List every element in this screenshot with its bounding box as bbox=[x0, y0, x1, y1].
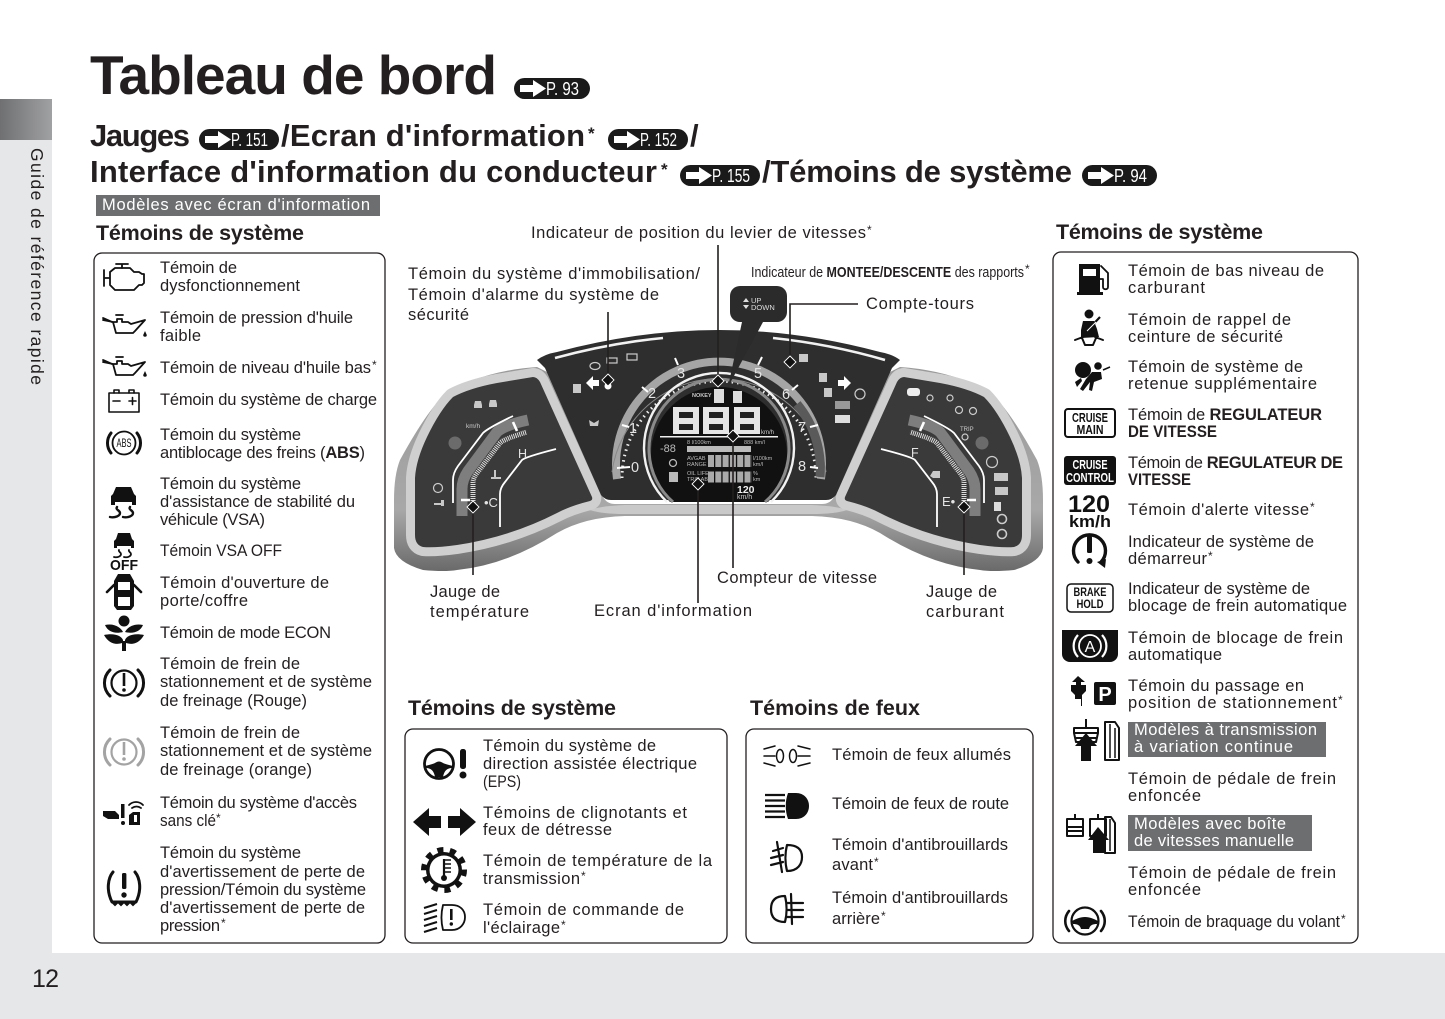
icon: brake hold: BRAKE bbox=[1074, 587, 1107, 599]
panel: central system indicators: Témoins de clignotants et bbox=[483, 804, 687, 822]
panel: left system indicators: antiblocage des freins (ABS) bbox=[160, 444, 365, 462]
icon: ABS bbox=[107, 432, 141, 454]
icon: cruise control: CONTROL bbox=[1066, 471, 1114, 485]
icon: cruise control: CRUISE bbox=[1072, 458, 1108, 472]
icon: orange brake bbox=[104, 739, 144, 765]
panel: left system indicators bbox=[94, 253, 385, 943]
label: tachometer: Compte-tours bbox=[866, 295, 974, 313]
panel: left system indicators: Témoin de niveau d'huile bas bbox=[160, 359, 371, 377]
icon: cruise main bbox=[1065, 409, 1115, 437]
label: shift position indicator: * bbox=[867, 223, 872, 237]
panel: light indicators: arrière bbox=[832, 910, 880, 928]
panel: left system indicators: d'assistance de stabilité du bbox=[160, 493, 355, 511]
tag: CVT: à variation continue bbox=[1134, 738, 1293, 756]
panel: central system indicators: Témoin du système de bbox=[483, 737, 656, 755]
panel: central system indicators bbox=[405, 729, 727, 943]
model tag: Modèles avec écran d'information bbox=[102, 196, 370, 214]
display readouts bbox=[660, 389, 778, 501]
panel: right system indicators: blocage de frein automatique bbox=[1128, 597, 1347, 615]
icon: VSA bbox=[110, 487, 136, 517]
panel: right system indicators: * bbox=[1338, 693, 1343, 707]
pod labels and tell-tales: F bbox=[911, 446, 919, 460]
display readouts: 888 km/l bbox=[744, 440, 765, 446]
icon: headlights on bbox=[764, 746, 810, 766]
heading: right system indicators: Témoins de système bbox=[1056, 220, 1263, 244]
icon: cruise main: CRUISE bbox=[1072, 411, 1108, 425]
subtitle heading: /Ecran d'information bbox=[281, 118, 585, 153]
panel: left system indicators: * bbox=[372, 358, 377, 372]
icon: fuel bbox=[1077, 264, 1108, 295]
label: speedometer: Compteur de vitesse bbox=[717, 569, 877, 587]
panel: left system indicators: porte/coffre bbox=[160, 592, 248, 610]
icon: oil level bbox=[103, 357, 147, 377]
display readouts: AVGAB bbox=[687, 456, 706, 462]
icon: speed alert: km/h bbox=[1069, 512, 1111, 531]
display readouts: -88 bbox=[660, 443, 676, 455]
panel: right system indicators: retenue supplémentaire bbox=[1128, 375, 1317, 393]
panel: right system indicators: enfoncée bbox=[1128, 881, 1201, 899]
icon: turn signals bbox=[413, 808, 476, 836]
pod labels and tell-tales: TRIP bbox=[960, 427, 974, 433]
subtitle heading: P. 94 bbox=[1114, 165, 1147, 186]
subtitle heading bbox=[90, 118, 1157, 189]
panel: right system indicators: VITESSE bbox=[1128, 471, 1191, 489]
panel: right system indicators: ceinture de sécurité bbox=[1128, 328, 1283, 346]
tachometer bbox=[612, 357, 826, 479]
tachometer: 6 bbox=[782, 387, 790, 403]
icon: door bbox=[107, 574, 141, 610]
label: information display: Ecran d'information bbox=[594, 602, 752, 620]
panel: right system indicators: * bbox=[1208, 549, 1213, 563]
subtitle heading: Interface d'information du conducteur bbox=[90, 154, 657, 189]
left pod gauges bbox=[448, 416, 556, 527]
sidebar label: Guide de référence rapide bbox=[27, 148, 47, 385]
panel: light indicators: Témoin d'antibrouillards bbox=[832, 889, 1008, 907]
display readouts: OIL LIFE bbox=[687, 471, 709, 477]
panel: left system indicators: d'avertissement de perte de bbox=[160, 863, 365, 881]
panel: left system indicators: Témoin de frein de bbox=[160, 655, 300, 673]
panel: central system indicators: l'éclairage bbox=[483, 919, 560, 937]
icon: shift to park bbox=[1071, 676, 1116, 707]
panel: right system indicators: automatique bbox=[1128, 646, 1222, 664]
subtitle heading: P. 152 bbox=[640, 129, 677, 150]
display readouts: 120 bbox=[737, 484, 755, 496]
panel: light indicators: Témoin de feux allumés bbox=[832, 746, 1011, 764]
tag: manual: Modèles avec boîte bbox=[1134, 815, 1286, 833]
icon: cruise control bbox=[1064, 456, 1116, 485]
panel: light indicators: Témoin de feux de route bbox=[832, 795, 1009, 813]
display readouts: km bbox=[753, 477, 761, 483]
display readouts: NOKEY bbox=[692, 393, 712, 399]
panel: right system indicators: Témoin de pédale de frein bbox=[1128, 770, 1336, 788]
leader lines and diamonds bbox=[467, 245, 970, 603]
icon: seat belt bbox=[1075, 310, 1103, 345]
panel: left system indicators: dysfonctionnement bbox=[160, 277, 300, 295]
shift-up callout: UP bbox=[751, 296, 761, 305]
icon: ABS: ABS bbox=[116, 438, 132, 450]
display readouts: km/h bbox=[761, 430, 774, 436]
icon: ECON bbox=[104, 616, 144, 651]
display readouts: 8 l/100km bbox=[687, 440, 711, 446]
panel: left system indicators: Témoin d'ouverture de bbox=[160, 574, 329, 592]
panel: left system indicators: pression bbox=[160, 917, 220, 935]
page reference pill P.93 bbox=[514, 78, 590, 99]
label: temperature gauge: température bbox=[430, 603, 529, 621]
icon: shift to park: P bbox=[1098, 684, 1112, 706]
subtitle heading: * bbox=[588, 124, 595, 143]
heading: light indicators: Témoins de feux bbox=[750, 696, 920, 720]
icon: red brake bbox=[104, 670, 144, 696]
label: temperature gauge bbox=[430, 583, 529, 621]
icon: keyless bbox=[103, 802, 143, 825]
panel: right system indicators: Témoin de REGULATEUR bbox=[1128, 406, 1322, 424]
panel: left system indicators: stationnement et de système bbox=[160, 742, 372, 760]
icon: VSA OFF bbox=[110, 533, 138, 574]
panel: light indicators: avant bbox=[832, 856, 873, 874]
label: fuel gauge: Jauge de bbox=[926, 583, 997, 601]
center lower silver band bbox=[590, 505, 847, 514]
display readouts: % bbox=[753, 471, 758, 477]
panel: central system indicators: Témoin de commande de bbox=[483, 901, 684, 919]
panel: left system indicators: Témoin de mode ECON bbox=[160, 624, 331, 642]
panel: left system indicators: Témoin du système de charge bbox=[160, 391, 377, 409]
icon: oil pressure bbox=[103, 315, 147, 337]
pod labels and tell-tales: km/h bbox=[466, 423, 480, 430]
tachometer: 7 bbox=[798, 420, 806, 436]
icon: speed alert bbox=[1068, 491, 1111, 531]
tag: manual bbox=[1128, 815, 1312, 851]
label: shift position indicator: Indicateur de position du levier de vitesses bbox=[531, 224, 866, 242]
label: fuel gauge: carburant bbox=[926, 603, 1004, 621]
pod labels and tell-tales: E• bbox=[942, 494, 956, 509]
subtitle heading: / bbox=[690, 118, 699, 153]
panel: left system indicators: de freinage (Rouge) bbox=[160, 692, 307, 710]
icon: start indicator bbox=[1074, 535, 1106, 568]
tag: CVT bbox=[1128, 721, 1326, 757]
left gauge pod bbox=[415, 377, 592, 547]
display readouts: l/100km bbox=[753, 456, 773, 462]
tachometer: 8 bbox=[798, 459, 806, 475]
icon: VSA OFF: OFF bbox=[110, 557, 138, 574]
panel: right system indicators: démarreur bbox=[1128, 550, 1208, 568]
label: up/down indicator: Indicateur de MONTEE/DESCENTE des rapports bbox=[751, 264, 1024, 281]
panel: left system indicators: * bbox=[221, 916, 226, 930]
panel: right system indicators bbox=[1053, 252, 1358, 943]
label: immobilizer: Témoin du système d'immobilisation/ bbox=[408, 265, 700, 283]
icon: MT brake pedal bbox=[1067, 814, 1115, 853]
label: immobilizer bbox=[408, 265, 700, 324]
subtitle heading: P. 155 bbox=[712, 165, 750, 186]
panel: right system indicators: Témoin de pédale de frein bbox=[1128, 864, 1336, 882]
instrument cluster bbox=[394, 286, 1043, 571]
icon: cruise main: MAIN bbox=[1076, 423, 1104, 437]
icon: speed alert: 120 bbox=[1068, 491, 1110, 518]
panel: central system indicators: (EPS) bbox=[483, 773, 521, 791]
panel: left system indicators: stationnement et de système bbox=[160, 673, 372, 691]
icon: engine bbox=[104, 264, 144, 290]
label: immobilizer: Témoin d'alarme du système de bbox=[408, 286, 659, 304]
panel: right system indicators: position de stationnement bbox=[1128, 694, 1337, 712]
sidebar tab bbox=[0, 99, 52, 140]
panel: right system indicators: Témoin de système de bbox=[1128, 358, 1303, 376]
panel: right system indicators: Indicateur de système de bbox=[1128, 580, 1310, 598]
icon: airbag bbox=[1075, 362, 1110, 391]
subtitle heading: * bbox=[661, 160, 668, 179]
page number: 12 bbox=[32, 965, 59, 993]
label: fuel gauge bbox=[926, 583, 1004, 621]
panel: right system indicators: Témoin de blocage de frein bbox=[1128, 629, 1343, 647]
panel: central system indicators: feux de détresse bbox=[483, 821, 612, 839]
panel: right system indicators: DE VITESSE bbox=[1128, 423, 1217, 441]
panel: left system indicators: Témoin du système d'accès bbox=[160, 794, 357, 812]
tachometer: 2 bbox=[648, 386, 656, 402]
panel: left system indicators: Témoin du système bbox=[160, 844, 301, 862]
panel: light indicators: Témoin d'antibrouillards bbox=[832, 836, 1008, 854]
panel: right system indicators: Témoin de braquage du volant bbox=[1128, 913, 1340, 931]
central housing bbox=[537, 330, 900, 500]
panel: left system indicators: Témoin du système bbox=[160, 426, 301, 444]
right pod gauges bbox=[881, 416, 988, 527]
panel: right system indicators: Indicateur de système de bbox=[1128, 533, 1314, 551]
display readouts: km/l bbox=[753, 462, 763, 468]
panel: left system indicators: Témoin de pression d'huile bbox=[160, 309, 353, 327]
icon: auto brake hold bbox=[1062, 630, 1118, 662]
panel: right system indicators: enfoncée bbox=[1128, 787, 1201, 805]
icon: lighting control bbox=[424, 904, 465, 932]
panel: light indicators bbox=[746, 729, 1033, 943]
panel: left system indicators: Témoin du système bbox=[160, 475, 301, 493]
icon: CVT brake pedal bbox=[1074, 719, 1119, 761]
panel: right system indicators: Témoin d'alerte vitesse bbox=[1128, 501, 1309, 519]
display readouts: RANGE bbox=[687, 462, 707, 468]
subtitle heading: P. 151 bbox=[231, 129, 268, 150]
icon: rear fog bbox=[771, 894, 803, 924]
pod labels and tell-tales bbox=[434, 354, 1008, 538]
tag: manual: de vitesses manuelle bbox=[1134, 832, 1294, 850]
page reference pill P.93: P. 93 bbox=[546, 78, 579, 99]
panel: left system indicators: Témoin VSA OFF bbox=[160, 542, 282, 560]
label: up/down indicator: * bbox=[1025, 262, 1030, 276]
right gauge pod bbox=[845, 377, 1022, 547]
panel: right system indicators: * bbox=[1341, 912, 1346, 926]
panel: left system indicators: de freinage (orange) bbox=[160, 761, 312, 779]
panel: left system indicators: Témoin de bbox=[160, 259, 237, 277]
icon: front fog bbox=[771, 842, 802, 872]
panel: central system indicators: direction assistée électrique bbox=[483, 755, 697, 773]
panel: right system indicators: Témoin du passage en bbox=[1128, 677, 1304, 695]
panel: right system indicators: Témoin de REGULATEUR DE bbox=[1128, 454, 1343, 472]
cluster silver outer bbox=[394, 367, 1043, 571]
panel: central system indicators: transmission bbox=[483, 870, 580, 888]
panel: right system indicators: carburant bbox=[1128, 279, 1205, 297]
panel: left system indicators: sans clé bbox=[160, 812, 216, 830]
panel: right system indicators: * bbox=[1310, 500, 1315, 514]
icon: steering bbox=[1065, 908, 1105, 934]
tachometer: 5 bbox=[754, 366, 762, 382]
panel: left system indicators: * bbox=[216, 811, 221, 825]
icon: battery bbox=[109, 390, 139, 412]
heading: left system indicators: Témoins de système bbox=[96, 221, 304, 245]
panel: left system indicators: faible bbox=[160, 327, 201, 345]
display disc bbox=[651, 387, 787, 502]
label: immobilizer: sécurité bbox=[408, 306, 469, 324]
panel: right system indicators: Témoin de rappel de bbox=[1128, 311, 1291, 329]
subtitle heading: Jauges bbox=[90, 118, 190, 153]
panel: central system indicators: * bbox=[581, 869, 586, 883]
panel: left system indicators: pression/Témoin du système bbox=[160, 881, 366, 899]
tachometer: 1 bbox=[629, 421, 637, 437]
icon: EPS bbox=[424, 749, 466, 778]
icon: TPMS bbox=[108, 872, 140, 905]
panel: left system indicators: d'avertissement de perte de bbox=[160, 899, 365, 917]
title: Tableau de bord bbox=[90, 44, 497, 106]
display readouts: TRIP AB bbox=[687, 477, 708, 483]
panel: right system indicators: Témoin de bas niveau de bbox=[1128, 262, 1324, 280]
icon: high beam bbox=[765, 793, 809, 819]
icon: auto brake hold: A bbox=[1085, 639, 1096, 656]
icon: brake hold bbox=[1067, 584, 1113, 612]
display readouts: km/h bbox=[737, 494, 752, 501]
tachometer: 3 bbox=[677, 366, 685, 382]
panel: central system indicators: * bbox=[561, 918, 566, 932]
tachometer: 0 bbox=[631, 460, 639, 476]
panel: left system indicators: Témoin de frein de bbox=[160, 724, 300, 742]
pod labels and tell-tales: H bbox=[518, 447, 527, 461]
tag: CVT: Modèles à transmission bbox=[1134, 721, 1317, 739]
label: temperature gauge: Jauge de bbox=[430, 583, 500, 601]
shift-up callout: DOWN bbox=[751, 303, 775, 312]
pod labels and tell-tales: •C bbox=[484, 495, 498, 510]
icon: transmission temp bbox=[424, 850, 464, 890]
panel: light indicators: * bbox=[874, 855, 879, 869]
shift-up callout bbox=[728, 286, 787, 387]
subtitle heading: /Témoins de système bbox=[762, 154, 1072, 189]
panel: light indicators: * bbox=[881, 909, 886, 923]
panel: central system indicators: Témoin de température de la bbox=[483, 852, 713, 870]
heading: central system indicators: Témoins de système bbox=[408, 696, 616, 720]
icon: brake hold: HOLD bbox=[1076, 599, 1104, 611]
panel: left system indicators: véhicule (VSA) bbox=[160, 511, 265, 529]
